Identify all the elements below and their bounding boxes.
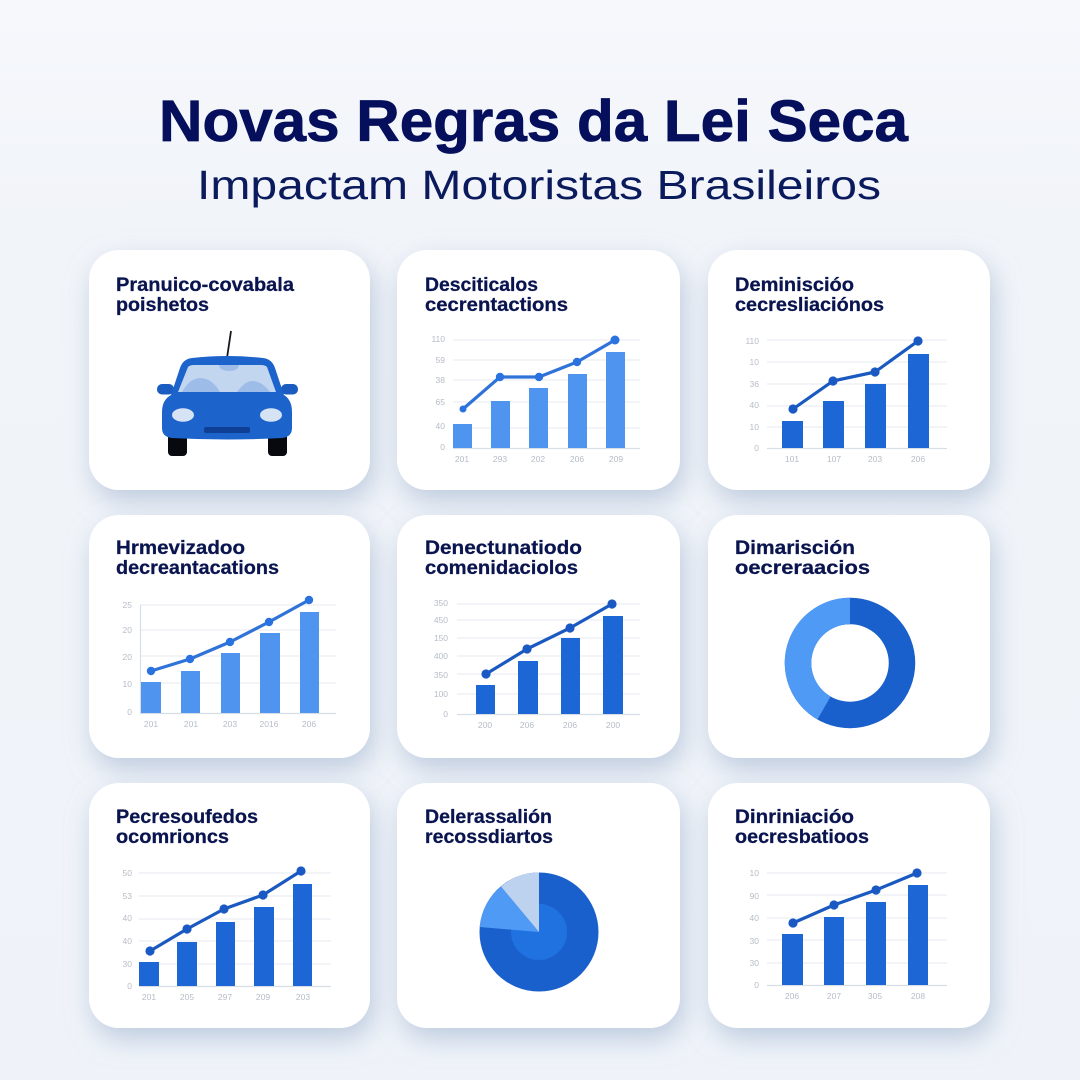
combo chart: 201: [142, 992, 156, 1002]
panel heading: Denectunatiodo: [425, 538, 582, 559]
panel heading: ocomrioncs: [116, 827, 229, 848]
combo chart: 10: [750, 357, 759, 367]
combo chart: 50: [123, 868, 132, 878]
panel: chart 7: [89, 783, 370, 1028]
combo chart: 305: [868, 991, 882, 1001]
combo chart: 0: [440, 442, 445, 452]
combo chart: 30: [750, 936, 759, 946]
donut chart: [798, 611, 902, 715]
combo chart: 200: [478, 720, 492, 730]
combo chart: 297: [218, 992, 232, 1002]
panel heading: cecrentactions: [425, 295, 568, 316]
combo chart: 100: [434, 689, 448, 699]
combo chart: 107: [827, 454, 841, 464]
panel heading: Desciticalos: [425, 275, 538, 296]
panel: chart 4: [89, 515, 370, 758]
combo chart: 203: [223, 719, 237, 729]
combo chart: 20: [123, 652, 132, 662]
combo chart: 20: [123, 625, 132, 635]
combo chart: 205: [180, 992, 194, 1002]
panel heading: cecresliaciónos: [735, 295, 884, 316]
combo chart: 40: [750, 400, 759, 410]
combo chart: 350: [434, 670, 448, 680]
panel heading: Deminiscióo: [735, 275, 854, 296]
panel heading: comenidaciolos: [425, 558, 578, 579]
combo chart: 203: [868, 454, 882, 464]
panel: chart 9: [708, 783, 990, 1028]
combo chart: 36: [750, 379, 759, 389]
combo chart: 65: [436, 397, 445, 407]
combo chart: 40: [123, 913, 132, 923]
panel heading: Dinriniacióo: [735, 807, 854, 828]
combo chart: [123, 866, 331, 1002]
combo chart: [431, 334, 640, 464]
combo chart: 0: [754, 443, 759, 453]
combo chart: 2016: [260, 719, 279, 729]
combo chart: 200: [606, 720, 620, 730]
panel heading: Hrmevizadoo: [116, 538, 245, 559]
panel heading: oecreraacios: [735, 558, 870, 579]
combo chart: 150: [434, 633, 448, 643]
combo chart: 10: [123, 679, 132, 689]
combo chart: [123, 596, 336, 729]
combo chart: 208: [911, 991, 925, 1001]
title: [159, 89, 909, 208]
title: Novas Regras da Lei Seca: [159, 89, 909, 154]
combo chart: 0: [754, 980, 759, 990]
combo chart: 30: [750, 958, 759, 968]
combo chart: 206: [302, 719, 316, 729]
combo chart: 206: [570, 454, 584, 464]
combo chart: 350: [434, 598, 448, 608]
combo chart: 25: [123, 600, 132, 610]
combo chart: 201: [455, 454, 469, 464]
combo chart: 101: [785, 454, 799, 464]
combo chart: [750, 868, 947, 1001]
combo chart: 40: [123, 936, 132, 946]
combo chart: 40: [750, 913, 759, 923]
combo chart: 10: [750, 422, 759, 432]
subtitle: Impactam Motoristas Brasileiros: [197, 162, 881, 208]
combo chart: [434, 598, 640, 730]
panel: chart 2: [397, 250, 680, 490]
combo chart: 0: [127, 707, 132, 717]
combo chart: 450: [434, 615, 448, 625]
icon: car front: [157, 331, 298, 456]
combo chart: 90: [750, 891, 759, 901]
combo chart: 0: [443, 709, 448, 719]
combo chart: 206: [520, 720, 534, 730]
combo chart: 202: [531, 454, 545, 464]
combo chart: 0: [127, 981, 132, 991]
panel heading: Pecresoufedos: [116, 807, 258, 828]
panel heading: decreantacations: [116, 558, 279, 579]
combo chart: 201: [144, 719, 158, 729]
panel: chart 5: [397, 515, 680, 758]
combo chart: 206: [785, 991, 799, 1001]
panel: donut: [708, 515, 990, 758]
combo chart: 110: [431, 334, 445, 344]
combo chart: 201: [184, 719, 198, 729]
combo chart: 59: [436, 355, 445, 365]
panel heading: Delerassalión: [425, 807, 552, 828]
combo chart: 206: [911, 454, 925, 464]
pie chart: [480, 872, 598, 992]
panel heading: Pranuico-covabala: [116, 275, 294, 296]
combo chart: 53: [123, 891, 132, 901]
combo chart: 110: [745, 336, 759, 346]
combo chart: 293: [493, 454, 507, 464]
combo chart: 209: [609, 454, 623, 464]
panel: pie: [397, 783, 680, 1028]
panel heading: poishetos: [116, 295, 209, 316]
combo chart: 10: [750, 868, 759, 878]
panel heading: recossdiartos: [425, 827, 553, 848]
combo chart: 207: [827, 991, 841, 1001]
panel heading: oecresbatioos: [735, 827, 869, 848]
combo chart: [745, 336, 947, 464]
panel heading: Dimarisción: [735, 538, 855, 559]
combo chart: 38: [436, 375, 445, 385]
panel: car: [89, 250, 370, 490]
combo chart: 40: [436, 421, 445, 431]
combo chart: 203: [296, 992, 310, 1002]
combo chart: 400: [434, 651, 448, 661]
combo chart: 209: [256, 992, 270, 1002]
panel: chart 3: [708, 250, 990, 490]
combo chart: 206: [563, 720, 577, 730]
combo chart: 30: [123, 959, 132, 969]
